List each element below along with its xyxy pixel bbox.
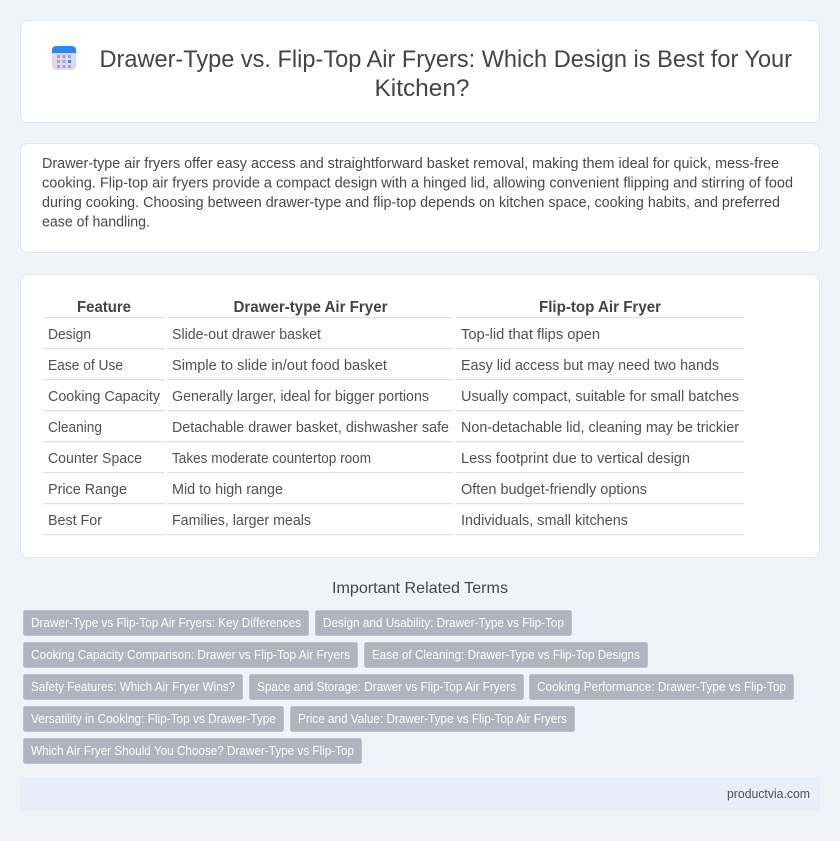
text block: introduction paragraph: Drawer-type air fryers offer easy access and straightforward basket removal, making them ideal for quick, mess-free xyxy=(42,155,779,172)
footer: productvia.com xyxy=(727,787,810,801)
table row: best for: Best For xyxy=(48,513,102,529)
tag: Space and Storage: Drawer vs Flip-Top Air Fryers xyxy=(257,680,516,694)
table row: design: Design xyxy=(48,327,91,343)
table row: cooking capacity: Cooking Capacity xyxy=(48,389,161,405)
table row: counter space: Counter Space xyxy=(48,451,142,467)
table row: ease of use: Easy lid access but may need two hands xyxy=(461,358,719,374)
tag: Cooking Performance: Drawer-Type vs Flip-Top xyxy=(537,680,786,694)
title: Kitchen? xyxy=(374,75,470,102)
table row: cooking capacity xyxy=(48,389,739,405)
footer xyxy=(20,777,820,811)
table row: cleaning: Detachable drawer basket, dishwasher safe xyxy=(172,420,449,436)
tag: Ease of Cleaning: Drawer-Type vs Flip-Top Designs xyxy=(372,648,640,662)
table row: design xyxy=(48,327,600,343)
table row: cleaning: Cleaning xyxy=(48,420,102,436)
table row: cooking capacity: Usually compact, suitable for small batches xyxy=(461,389,739,405)
table row: price range: Price Range xyxy=(48,482,127,498)
tag: Design and Usability: Drawer-Type vs Flip-Top xyxy=(323,616,564,630)
table row: cleaning: Non-detachable lid, cleaning may be trickier xyxy=(461,420,739,436)
table row: cooking capacity: Generally larger, ideal for bigger portions xyxy=(172,389,429,405)
panel: introduction xyxy=(20,144,820,252)
tag: Versatility in Cooking: Flip-Top vs Drawer-Type xyxy=(31,712,276,726)
tag xyxy=(530,674,794,700)
table row: counter space: Less footprint due to vertical design xyxy=(461,451,690,467)
text block: introduction paragraph: cooking. Flip-top air fryers provide a compact design with a hinged lid, allowing convenient flipping and stirring of food xyxy=(42,174,793,192)
panel: title header xyxy=(20,20,820,122)
heading: important related terms: Important Related Terms xyxy=(332,580,508,597)
tag: Safety Features: Which Air Fryer Wins? xyxy=(31,680,235,694)
tag xyxy=(24,674,242,700)
related term tags xyxy=(24,610,794,764)
table row: best for: Individuals, small kitchens xyxy=(461,513,628,529)
table row: price range: Mid to high range xyxy=(172,482,283,498)
tag xyxy=(24,738,362,764)
table row: price range xyxy=(48,482,647,498)
table row: best for: Families, larger meals xyxy=(172,513,311,529)
tag: Which Air Fryer Should You Choose? Drawer-Type vs Flip-Top xyxy=(31,744,354,758)
text block: introduction paragraph xyxy=(42,155,793,230)
tag: Price and Value: Drawer-Type vs Flip-Top Air Fryers xyxy=(298,712,567,726)
tag xyxy=(364,642,648,668)
tag xyxy=(290,706,574,732)
table header: Drawer-type Air Fryer xyxy=(234,299,388,316)
table header: Feature xyxy=(77,299,131,316)
text block: introduction paragraph: during cooking. Choosing between drawer-type and flip-top depends on kitchen space, cooking habits, and preferred xyxy=(42,194,780,211)
table row: ease of use xyxy=(48,358,719,374)
icon: calendar xyxy=(52,46,76,70)
table row: counter space: Takes moderate countertop room xyxy=(172,451,371,467)
tag xyxy=(250,674,524,700)
tag xyxy=(24,706,284,732)
title xyxy=(100,46,792,102)
table header xyxy=(77,299,661,316)
title: Drawer-Type vs. Flip-Top Air Fryers: Which Design is Best for Your xyxy=(100,46,792,73)
panel: comparison table xyxy=(20,274,820,558)
table row: price range: Often budget-friendly options xyxy=(461,482,647,498)
tag xyxy=(316,610,572,636)
tag: Cooking Capacity Comparison: Drawer vs Flip-Top Air Fryers xyxy=(31,648,350,662)
tag: Drawer-Type vs Flip-Top Air Fryers: Key Differences xyxy=(31,616,301,630)
table row: ease of use: Ease of Use xyxy=(48,358,123,374)
table row: cleaning xyxy=(48,420,739,436)
table row: design: Slide-out drawer basket xyxy=(172,327,321,343)
table header: Flip-top Air Fryer xyxy=(539,299,661,316)
tag xyxy=(24,610,308,636)
tag xyxy=(24,642,358,668)
table row: best for xyxy=(48,513,628,529)
text block: introduction paragraph: ease of handling. xyxy=(42,214,150,230)
table row: counter space xyxy=(48,451,690,467)
table row: design: Top-lid that flips open xyxy=(461,327,600,343)
table row: ease of use: Simple to slide in/out food basket xyxy=(172,358,387,374)
